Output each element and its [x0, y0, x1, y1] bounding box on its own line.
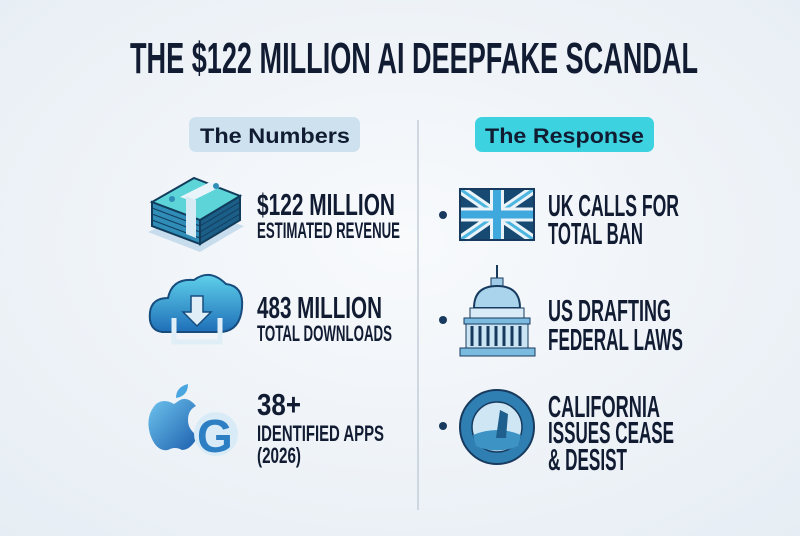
panel: the response [439, 117, 683, 477]
text: UK [548, 188, 679, 251]
icon: app stores: G [197, 410, 233, 462]
heading: The Numbers: The Numbers [200, 125, 350, 148]
stat: apps [257, 387, 384, 468]
stat: downloads [257, 290, 392, 346]
text: UK: TOTAL BAN [548, 216, 643, 251]
stat: downloads: TOTAL DOWNLOADS [257, 321, 392, 346]
heading: The Response [475, 117, 654, 152]
stat: revenue [257, 187, 400, 243]
icon: UK flag [439, 189, 534, 240]
icon: money stack [148, 178, 244, 252]
text: US: US DRAFTING [548, 293, 671, 328]
stat: downloads: 483 MILLION [257, 290, 382, 325]
text: California: ISSUES CEASE [548, 415, 674, 450]
text: California [548, 389, 674, 477]
heading: The Response: The Response [485, 125, 644, 148]
panel: the numbers [148, 117, 400, 468]
stat: revenue: ESTIMATED REVENUE [257, 218, 400, 243]
text: US [548, 293, 683, 357]
text: California: CALIFORNIA [548, 389, 660, 424]
icon: capitol [439, 265, 535, 356]
text: California: & DESIST [548, 442, 627, 477]
icon: california seal [439, 390, 534, 464]
icon: app stores [148, 384, 238, 462]
icon: cloud download [150, 275, 242, 342]
stat: apps: IDENTIFIED APPS [257, 421, 384, 446]
stat: apps: 38+ [257, 387, 301, 422]
text: US: FEDERAL LAWS [548, 322, 683, 357]
text: UK: UK CALLS FOR [548, 188, 679, 223]
stat: apps: (2026) [257, 443, 301, 468]
stat: revenue: $122 MILLION [257, 187, 395, 222]
heading: The Numbers [189, 117, 360, 152]
